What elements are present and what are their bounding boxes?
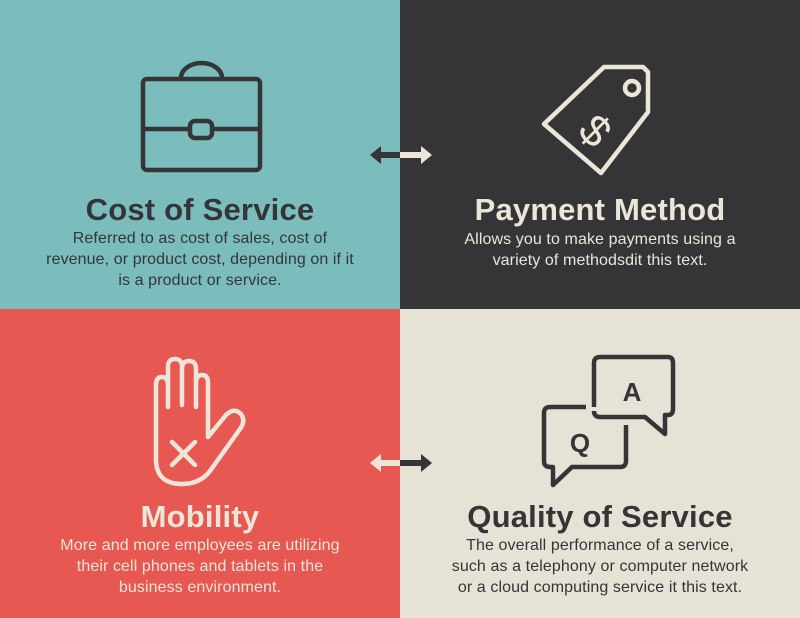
panel: payment method — [400, 0, 800, 309]
text: quality of service description — [452, 537, 748, 596]
heading: mobility: Mobility — [141, 499, 259, 534]
icon: Q and A speech bubbles: Q — [570, 428, 590, 458]
text: cost of service description: revenue, or product cost, depending on if it — [46, 251, 354, 268]
text: mobility description: More and more employees are utilizing — [60, 537, 340, 554]
text: cost of service description: Referred to as cost of sales, cost of — [73, 230, 327, 247]
text: payment method description — [464, 231, 736, 269]
heading: cost of service: Cost of Service — [86, 192, 314, 227]
icon: price tag: $ — [569, 105, 621, 157]
panel: cost of service — [0, 0, 400, 309]
text: quality of service description: The overall performance of a service, — [466, 537, 734, 554]
icon: price tag — [542, 64, 650, 176]
text: payment method description: variety of methodsdit this text. — [493, 252, 707, 269]
arrow: top double arrow — [370, 146, 432, 164]
heading: payment method: Payment Method — [475, 192, 725, 227]
text: mobility description: their cell phones and tablets in the — [77, 558, 323, 575]
icon: Q and A speech bubbles — [542, 354, 676, 488]
text: cost of service description: is a product or service. — [118, 272, 282, 289]
text: payment method description: Allows you to make payments using a — [464, 231, 736, 248]
arrow: bottom double arrow — [370, 454, 432, 472]
icon: Q and A speech bubbles: A — [623, 377, 642, 407]
icon: briefcase — [140, 60, 262, 172]
heading: quality of service: Quality of Service — [467, 499, 733, 534]
icon: hand with x — [154, 356, 246, 486]
text: quality of service description: or a cloud computing service it this text. — [458, 579, 742, 596]
text: mobility description: business environment. — [119, 579, 281, 596]
text: cost of service description — [46, 230, 354, 289]
text: quality of service description: such as a telephony or computer network — [452, 558, 748, 575]
panel: mobility — [0, 309, 400, 618]
text: mobility description — [60, 537, 340, 596]
panel: quality of service — [400, 309, 800, 618]
